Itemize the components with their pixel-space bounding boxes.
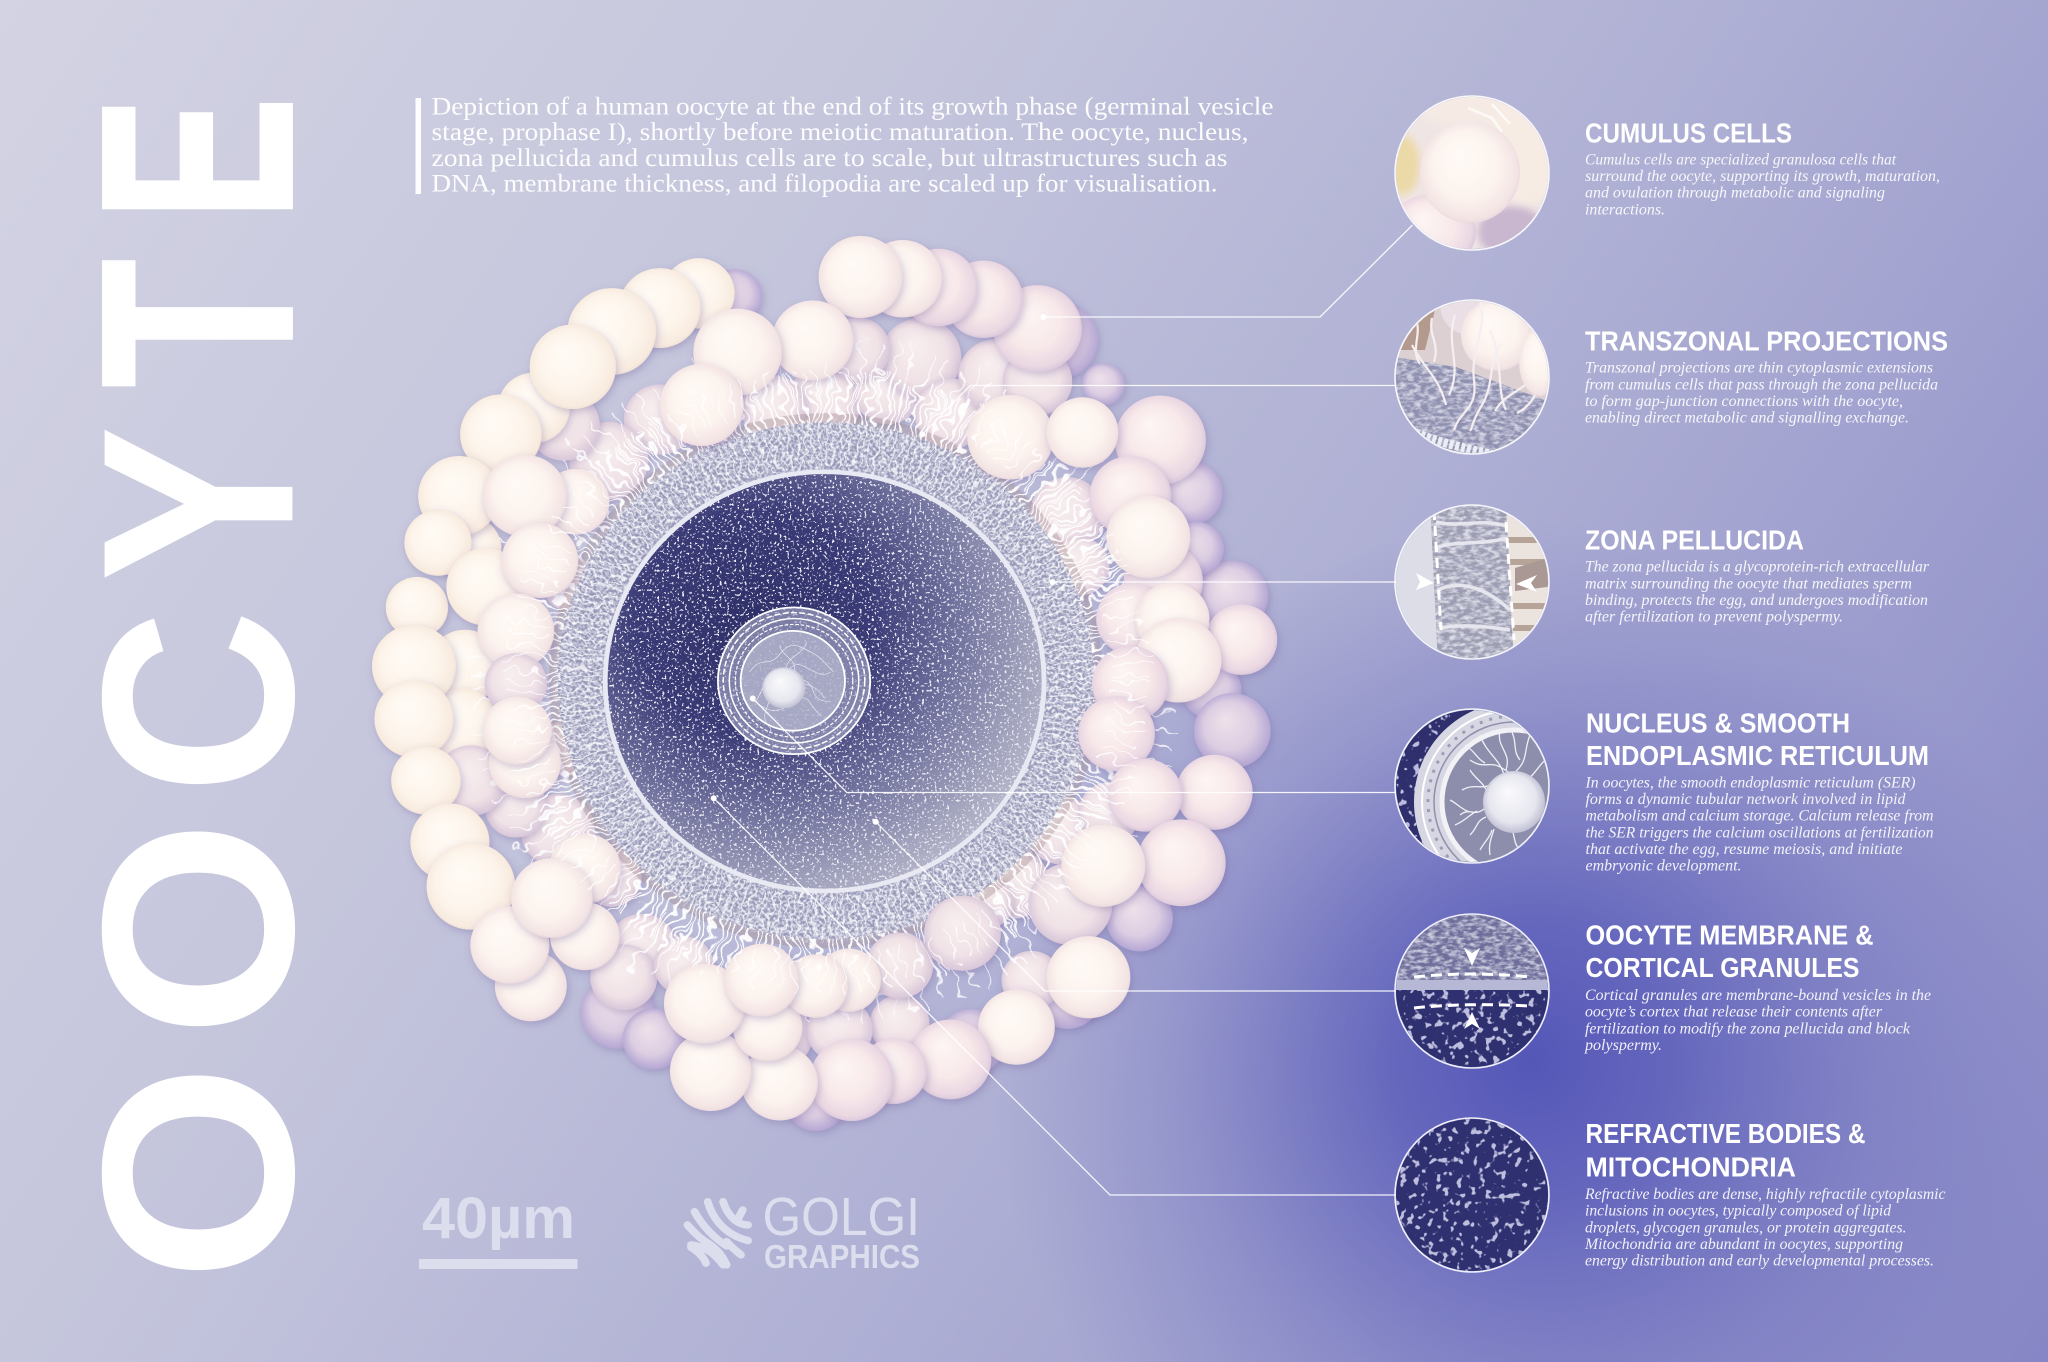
leader line: cumulus cells: [1040, 225, 1412, 320]
description: surround the oocyte, supporting its growth, maturation,: [1585, 168, 1940, 185]
title: C: [45, 610, 350, 795]
leader line: zona pellucida: [1049, 579, 1396, 585]
leader line: refractive bodies: [711, 795, 1396, 1195]
logo: Golgi Graphics: [687, 1187, 920, 1275]
zona pellucida: [540, 408, 1109, 954]
panel: nucleus and smooth endoplasmic reticulum: [1394, 708, 1933, 874]
logo: Golgi Graphics: GRAPHICS: [764, 1238, 920, 1275]
description: energy distribution and early developmental processes.: [1585, 1253, 1934, 1270]
title: E: [44, 97, 349, 221]
description: [1584, 987, 1931, 1054]
heading: ZONA PELLUCIDA: [1585, 524, 1804, 555]
heading: CUMULUS CELLS: [1585, 117, 1792, 148]
title: O: [45, 820, 350, 1038]
heading: [1586, 1118, 1866, 1182]
heading: TRANSZONAL PROJECTIONS: [1585, 326, 1948, 357]
icon: transzonal projections detail: [1394, 299, 1550, 455]
description: forms a dynamic tubular network involved in lipid: [1586, 791, 1906, 808]
description: enabling direct metabolic and signalling exchange.: [1585, 410, 1909, 427]
intro text block: zona pellucida and cumulus cells are to scale, but ultrastructures such as: [432, 145, 1228, 172]
intro text block: [416, 93, 1274, 198]
heading: REFRACTIVE BODIES &: [1586, 1118, 1866, 1149]
description: droplets, glycogen granules, or protein aggregates.: [1585, 1219, 1906, 1236]
title: Y: [45, 426, 350, 582]
intro text block: DNA, membrane thickness, and filopodia are scaled up for visualisation.: [432, 171, 1218, 198]
heading: MITOCHONDRIA: [1586, 1151, 1796, 1182]
heading: OOCYTE MEMBRANE &: [1586, 919, 1874, 950]
front layer of cumulus cells: [372, 236, 1277, 1121]
icon: nucleus detail: [1394, 708, 1550, 864]
heading: [1586, 707, 1929, 771]
description: [1584, 1186, 1946, 1270]
description: Refractive bodies are dense, highly refractile cytoplasmic: [1584, 1186, 1946, 1203]
title: O: [45, 1064, 350, 1282]
description: matrix surrounding the oocyte that mediates sperm: [1585, 575, 1912, 592]
description: interactions.: [1585, 201, 1665, 218]
leader line: transzonal projections: [919, 386, 1396, 437]
icon: cumulus cells detail: [1394, 95, 1550, 251]
nucleus with smooth endoplasmic reticulum: [718, 607, 870, 754]
panel: refractive bodies and mitochondria: [1390, 1115, 1946, 1280]
heading: ENDOPLASMIC RETICULUM: [1586, 740, 1929, 771]
description: The zona pellucida is a glycoprotein-rich extracellular: [1585, 559, 1930, 576]
panel: oocyte membrane and cortical granules: [1390, 910, 1931, 1073]
description: [1585, 559, 1930, 626]
intro text block: stage, prophase I), shortly before meiotic maturation. The oocyte, nucleus,: [432, 119, 1248, 146]
description: Mitochondria are abundant in oocytes, supporting: [1584, 1236, 1903, 1253]
leader line: nucleus: [750, 695, 1396, 792]
central illustration: oocyte with cumulus cells: [372, 236, 1277, 1131]
panel: zona pellucida: [1390, 500, 1930, 665]
leader line: membrane: [873, 819, 1396, 991]
panel: cumulus cells: [1394, 95, 1939, 251]
icon: refractive bodies detail: [1394, 1117, 1550, 1273]
back layer of cumulus cells: [425, 269, 1268, 1131]
filopodia hair ring: [496, 363, 1156, 999]
oocyte cytoplasm with granules: [600, 467, 1049, 898]
description: polyspermy.: [1584, 1037, 1662, 1054]
filopodia over the cells: [523, 388, 1129, 973]
description: to form gap-junction connections with the oocyte,: [1585, 393, 1903, 410]
description: Cortical granules are membrane-bound vesicles in the: [1585, 987, 1931, 1004]
description: [1585, 151, 1940, 218]
heading: NUCLEUS & SMOOTH: [1586, 707, 1850, 738]
description: binding, protects the egg, and undergoes modification: [1585, 592, 1928, 609]
scale bar: 40µm: [422, 1186, 575, 1251]
description: Cumulus cells are specialized granulosa cells that: [1585, 151, 1897, 168]
description: and ovulation through metabolic and signaling: [1585, 185, 1885, 202]
description: from cumulus cells that pass through the zona pellucida: [1585, 376, 1938, 393]
icon: zona pellucida detail: [1394, 504, 1550, 660]
heading: [1586, 919, 1874, 983]
panel: transzonal projections: [1394, 299, 1947, 455]
shadow ring under zona: [549, 413, 1103, 948]
description: [1585, 360, 1938, 427]
description: metabolism and calcium storage. Calcium release from: [1586, 808, 1934, 825]
description: the SER triggers the calcium oscillations at fertilization: [1586, 824, 1934, 841]
description: after fertilization to prevent polyspermy.: [1585, 609, 1843, 626]
title: [44, 97, 350, 1282]
description: Transzonal projections are thin cytoplasmic extensions: [1585, 360, 1933, 377]
description: In oocytes, the smooth endoplasmic reticulum (SER): [1585, 774, 1916, 791]
description: inclusions in oocytes, typically composed of lipid: [1585, 1203, 1892, 1220]
nucleolus: [762, 667, 805, 708]
description: embryonic development.: [1586, 858, 1742, 875]
description: oocyte’s cortex that release their contents after: [1585, 1004, 1883, 1021]
description: that activate the egg, resume meiosis, and initiate: [1586, 841, 1902, 858]
description: [1585, 774, 1934, 875]
heading: CORTICAL GRANULES: [1586, 952, 1860, 983]
title: T: [44, 260, 349, 388]
intro text block: Depiction of a human oocyte at the end of its growth phase (germinal vesicle: [432, 93, 1274, 120]
icon: membrane detail: [1390, 910, 1555, 1073]
description: fertilization to modify the zona pellucida and block: [1585, 1020, 1911, 1037]
logo: Golgi Graphics: GOLGI: [762, 1187, 920, 1247]
